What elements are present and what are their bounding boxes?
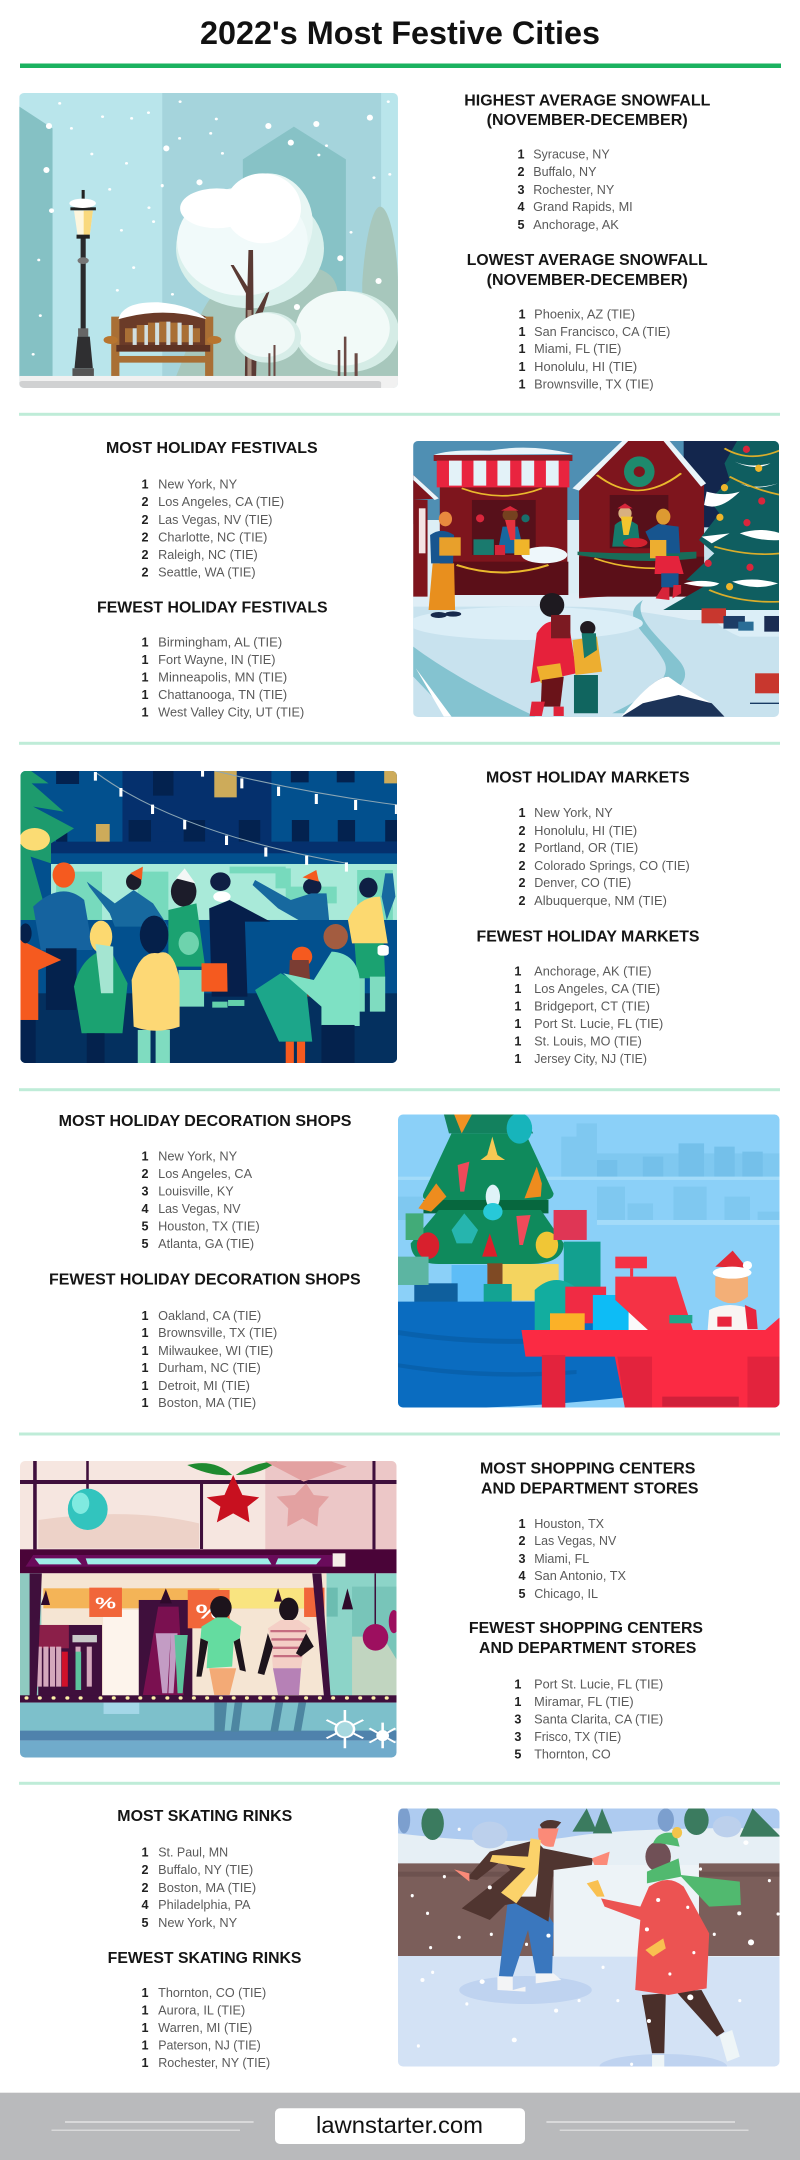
panel: holiday markets [19,769,700,1066]
store interior [41,1573,327,1697]
list: most skating rinks cities: Philadelphia, PA [158,1898,251,1912]
icon: ice shadow [459,1976,592,2004]
list: most decoration shops cities: 3 [141,1184,148,1198]
list: fewest decoration shops cities: Detroit, MI (TIE) [158,1379,250,1393]
list: most skating rinks cities [141,1846,256,1930]
list: most decoration shops cities: New York, NY [158,1150,238,1164]
icon: floor light strip [20,1695,397,1703]
list: highest snowfall cities: Grand Rapids, MI [533,200,633,214]
list: most festivals cities: Los Angeles, CA (TIE) [158,495,284,509]
list: fewest skating rinks cities: Aurora, IL (TIE) [158,2004,245,2018]
list: fewest markets cities: 1 [514,1034,521,1048]
list: fewest shopping centers cities [514,1678,663,1762]
list: fewest shopping centers cities: 5 [514,1748,521,1762]
list: most festivals cities [141,478,284,580]
heading: fewest holiday festivals: FEWEST HOLIDAY FESTIVALS [97,599,328,616]
list: fewest decoration shops cities: 1 [141,1379,148,1393]
list: most shopping centers cities: Chicago, IL [534,1587,598,1601]
icon: sale signs: % [95,1595,116,1612]
list: most decoration shops cities [141,1150,260,1251]
list: most shopping centers cities: 3 [518,1552,526,1566]
list: most markets cities: Portland, OR (TIE) [534,841,638,855]
list: fewest festivals cities: Birmingham, AL (TIE) [158,636,282,650]
icon: woman customer [645,509,684,600]
list: fewest markets cities [514,964,663,1066]
list: most markets cities: New York, NY [534,806,613,820]
list: lowest snowfall cities: 1 [518,308,526,322]
icon: teal ornament [68,1461,108,1530]
icon: child teal coat [255,947,312,1063]
list: fewest markets cities: 1 [514,982,521,996]
heading: fewest skating rinks: FEWEST SKATING RINKS [108,1950,302,1967]
list: most decoration shops cities: 5 [141,1220,148,1234]
heading: most skating rinks: MOST SKATING RINKS [117,1808,292,1825]
list: fewest markets cities: St. Louis, MO (TIE) [534,1034,642,1048]
list: most markets cities: Colorado Springs, CO (TIE) [534,859,690,873]
list: fewest festivals cities: 1 [141,653,148,667]
icon: striped shirt mannequin [258,1598,314,1695]
icon: child in yellow coat [572,621,602,713]
list: fewest shopping centers cities: 1 [514,1678,521,1692]
snowfall dots [411,1828,780,2066]
list: most decoration shops cities: Los Angeles, CA [158,1167,253,1181]
list: lowest snowfall cities: Brownsville, TX (TIE) [534,378,654,392]
heading: fewest decoration shops: FEWEST HOLIDAY DECORATION SHOPS [49,1272,361,1289]
list: fewest markets cities: 1 [514,1052,521,1066]
list: fewest decoration shops cities: 1 [141,1396,148,1410]
list: most festivals cities: Raleigh, NC (TIE) [158,548,258,562]
icon: woman dark coat [202,872,270,1008]
list: most markets cities [518,806,690,908]
list: most markets cities: 1 [518,806,526,820]
list: lowest snowfall cities [518,308,670,392]
list: fewest decoration shops cities: 1 [141,1344,148,1358]
list: highest snowfall cities: 3 [517,183,524,197]
list: fewest markets cities: Port St. Lucie, FL (TIE) [534,1017,663,1031]
list: highest snowfall cities: Buffalo, NY [533,165,597,179]
list: most markets cities: Albuquerque, NM (TIE) [534,894,667,908]
heading: lowest average snowfall: LOWEST AVERAGE SNOWFALL [467,252,708,269]
list: fewest decoration shops cities: 1 [141,1326,148,1340]
list: fewest festivals cities: 1 [141,688,148,702]
list: fewest festivals cities: Minneapolis, MN (TIE) [158,670,287,684]
list: most decoration shops cities: 4 [141,1202,148,1216]
list: most festivals cities: 2 [141,513,148,527]
list: highest snowfall cities: Anchorage, AK [533,218,619,232]
heading: most holiday festivals: MOST HOLIDAY FESTIVALS [106,440,318,457]
list: fewest skating rinks cities: 1 [141,2056,148,2070]
list: most skating rinks cities: 2 [141,1881,148,1895]
list: fewest skating rinks cities: 1 [141,1986,148,2000]
heading: most shopping centers: AND DEPARTMENT STORES [481,1480,698,1497]
list: fewest festivals cities: Chattanooga, TN (TIE) [158,688,287,702]
icon: green bow and red star [187,1462,277,1522]
list: most skating rinks cities: New York, NY [158,1916,238,1930]
icon: woman yellow coat [132,916,180,1031]
icon: person blue sweater orange hat [33,862,93,1010]
list: highest snowfall cities: 4 [517,200,524,214]
list: most decoration shops cities: Louisville, KY [158,1184,234,1198]
list: lowest snowfall cities: 1 [518,325,526,339]
heading: most holiday markets: MOST HOLIDAY MARKETS [486,769,690,786]
list: fewest festivals cities: 1 [141,636,148,650]
list: most shopping centers cities: Las Vegas, NV [534,1534,617,1548]
list: lowest snowfall cities: 1 [518,378,526,392]
list: most shopping centers cities: 1 [518,1517,526,1531]
list: fewest decoration shops cities: Boston, MA (TIE) [158,1396,256,1410]
panel: holiday decoration shops [49,1113,783,1410]
list: most markets cities: 2 [518,824,526,838]
list: most festivals cities: Las Vegas, NV (TIE) [158,513,272,527]
list: lowest snowfall cities: Phoenix, AZ (TIE) [534,308,635,322]
list: fewest markets cities: Bridgeport, CT (TIE) [534,1000,650,1014]
icon: red counter [521,1317,781,1408]
list: most skating rinks cities: 4 [141,1898,148,1912]
list: most skating rinks cities: St. Paul, MN [158,1846,228,1860]
list: fewest festivals cities: 1 [141,670,148,684]
heading: fewest shopping centers [469,1620,703,1657]
icon: lamp post [69,190,96,377]
footer decorative lines left [52,2121,254,2131]
list: fewest decoration shops cities: Oakland, CA (TIE) [158,1309,261,1323]
icon: sale signs: % [196,1601,223,1623]
list: fewest markets cities: 1 [514,1000,521,1014]
list: most markets cities: 2 [518,876,526,890]
list: fewest shopping centers cities: 1 [514,1695,521,1709]
list: most markets cities: 2 [518,894,526,908]
list: lowest snowfall cities: Honolulu, HI (TIE) [534,360,637,374]
icon: pillars [30,1573,331,1697]
heading: highest average snowfall: (NOVEMBER-DECEMBER) [487,112,688,129]
list: fewest festivals cities: Fort Wayne, IN (TIE) [158,653,276,667]
list: most festivals cities: 2 [141,566,148,580]
icon: person green coat white scarf [74,921,170,1063]
illustration: ice skating couple [398,1805,781,2079]
list: fewest markets cities: 1 [514,964,521,978]
icon: person with orange coat left [19,923,61,1063]
list: fewest shopping centers cities: Miramar, FL (TIE) [534,1695,634,1709]
illustration: snowy park with bench and lamp post [19,93,399,389]
list: most festivals cities: 2 [141,530,148,544]
list: most shopping centers cities: Miami, FL [534,1552,589,1566]
heading: highest average snowfall: HIGHEST AVERAGE SNOWFALL [464,92,711,109]
list: most decoration shops cities: Las Vegas, NV [158,1202,241,1216]
icon: background trees [398,1805,781,1848]
icon: left vendor and gifts [473,506,530,555]
list: fewest decoration shops cities: Brownsville, TX (TIE) [158,1326,277,1340]
list: highest snowfall cities: 1 [517,148,524,162]
list: fewest markets cities: 1 [514,1017,521,1031]
icon: snow mound [622,677,724,717]
list: most skating rinks cities: 2 [141,1863,148,1877]
footer logo box [275,2108,525,2144]
list: fewest skating rinks cities: 1 [141,2004,148,2018]
footer decorative lines right [546,2121,748,2131]
list: lowest snowfall cities: 1 [518,360,526,374]
icon: white curtain [103,1610,140,1697]
list: most festivals cities: New York, NY [158,478,238,492]
list: most shopping centers cities: 5 [518,1587,526,1601]
icon: reflective floor [20,1703,397,1758]
heading: lowest average snowfall: (NOVEMBER-DECEMBER) [487,272,688,289]
title: 2022's Most Festive Cities [200,15,600,51]
icon: left market stall [434,448,572,595]
list: most shopping centers cities: 2 [518,1534,526,1548]
list: most festivals cities: Seattle, WA (TIE) [158,566,256,580]
list: fewest decoration shops cities: 1 [141,1361,148,1375]
list: most skating rinks cities: 1 [141,1846,148,1860]
footer site name: lawnstarter.com [316,2112,483,2138]
list: fewest shopping centers cities: Frisco, TX (TIE) [534,1730,621,1744]
list: fewest shopping centers cities: Santa Clarita, CA (TIE) [534,1712,663,1726]
icon: stacked gifts [702,608,781,704]
list: highest snowfall cities [517,148,633,232]
list: fewest decoration shops cities [141,1309,277,1410]
icon: pink bow and star reflection [265,1462,347,1527]
icon: string lights [94,771,398,872]
icon: man teal sweater [283,924,360,1063]
list: most festivals cities: 2 [141,548,148,562]
list: highest snowfall cities: 5 [517,218,524,232]
panel: shopping centers [20,1460,703,1762]
icon: cash register [615,1257,693,1330]
icon: magenta ornaments [363,1573,399,1651]
icon: cashier [708,1251,758,1330]
heading: most shopping centers [480,1460,698,1497]
list: fewest skating rinks cities: 1 [141,2021,148,2035]
icon: blue tiered platform [398,1302,633,1408]
title underline [20,64,781,68]
list: fewest markets cities: Los Angeles, CA (TIE) [534,982,660,996]
list: most markets cities: 2 [518,859,526,873]
icon: left clothing rack [37,1625,102,1697]
snowfall dots [32,100,391,356]
list: most markets cities: Honolulu, HI (TIE) [534,824,637,838]
icon: center clothing rack [139,1600,192,1697]
icon: snow bushes [235,291,399,377]
icon: ceiling frame [20,1461,398,1549]
icon: sale signs [89,1588,338,1628]
icon: right vendor and bowl [612,503,647,547]
list: fewest shopping centers cities: Thornton, CO [534,1748,611,1762]
list: most shopping centers cities: San Antonio, TX [534,1569,627,1583]
heading: fewest shopping centers: FEWEST SHOPPING CENTERS [469,1620,703,1637]
icon: right market stall [572,441,706,598]
list: most decoration shops cities: 2 [141,1167,148,1181]
list: fewest skating rinks cities: Warren, MI (TIE) [158,2021,252,2035]
list: most decoration shops cities: 1 [141,1150,148,1164]
icon: woman in red coat [530,593,577,716]
list: fewest decoration shops cities: Durham, NC (TIE) [158,1361,261,1375]
list: fewest shopping centers cities: 3 [514,1730,521,1744]
list: fewest markets cities: Jersey City, NJ (TIE) [534,1052,647,1066]
list: fewest skating rinks cities: Thornton, CO (TIE) [158,1986,266,2000]
icon: shopping bags [535,1280,651,1336]
icon: female skater [587,1827,741,2067]
panel: snowfall [19,92,711,392]
heading: most shopping centers: MOST SHOPPING CENTERS [480,1460,695,1477]
icon: hanging cone lamps [41,1588,353,1609]
list: fewest decoration shops cities: Milwaukee, WI (TIE) [158,1344,273,1358]
icon: green shirt mannequin [196,1596,246,1695]
list: most shopping centers cities: 4 [518,1569,526,1583]
list: most festivals cities: Charlotte, NC (TIE) [158,530,267,544]
icon: man holding gifts [429,512,461,618]
icon: vendor waving [253,870,329,920]
list: highest snowfall cities: 2 [517,165,524,179]
wall [398,1863,781,1956]
list: fewest shopping centers cities: 3 [514,1712,521,1726]
list: highest snowfall cities: Rochester, NY [533,183,615,197]
heading: most decoration shops: MOST HOLIDAY DECORATION SHOPS [59,1113,351,1130]
list: most skating rinks cities: Boston, MA (TIE) [158,1881,256,1895]
footer band [0,2093,800,2160]
list: most shopping centers cities: Houston, TX [534,1517,605,1531]
list: most shopping centers cities [518,1517,627,1601]
list: fewest skating rinks cities: 1 [141,2038,148,2052]
list: most decoration shops cities: Atlanta, GA (TIE) [158,1237,254,1251]
list: fewest festivals cities: West Valley City, UT (TIE) [158,706,304,720]
illustration: decoration shop with tree and cashier [398,1113,783,1409]
heading: fewest holiday markets: FEWEST HOLIDAY MARKETS [476,929,700,946]
panel: holiday festivals [97,440,781,720]
list: most decoration shops cities: 5 [141,1237,148,1251]
icon: snowflakes [327,1710,395,1748]
list: most markets cities: Denver, CO (TIE) [534,876,631,890]
heading: fewest shopping centers: AND DEPARTMENT STORES [479,1640,696,1657]
list: most festivals cities: 1 [141,478,148,492]
list: lowest snowfall cities: San Francisco, CA (TIE) [534,325,670,339]
icon: small side stall [413,475,439,597]
list: fewest skating rinks cities [141,1986,270,2070]
list: fewest shopping centers cities: Port St. Lucie, FL (TIE) [534,1678,663,1692]
list: fewest skating rinks cities: Rochester, NY (TIE) [158,2056,270,2070]
list: fewest markets cities: Anchorage, AK (TIE) [534,964,652,978]
icon: person yellow sweater back [348,873,395,1012]
illustration: christmas market [408,441,781,717]
icon: person green dress [168,868,205,1007]
illustration: crowd at holiday market [19,771,398,1064]
list: highest snowfall cities: Syracuse, NY [533,148,610,162]
icon: christmas tree with ornaments [406,1113,564,1284]
icon: christmas tree [663,441,781,610]
list: most markets cities: 2 [518,841,526,855]
list: lowest snowfall cities: Miami, FL (TIE) [534,342,621,356]
icon: male skater [454,1820,610,1992]
icon: gift boxes behind tree [398,1210,601,1311]
list: lowest snowfall cities: 1 [518,342,526,356]
icon: park bench [104,302,221,377]
list: most skating rinks cities: Buffalo, NY (TIE) [158,1863,253,1877]
list: most decoration shops cities: Houston, TX (TIE) [158,1220,260,1234]
heading: highest average snowfall [464,92,711,129]
heading: lowest average snowfall [467,252,708,289]
list: fewest decoration shops cities: 1 [141,1309,148,1323]
list: most skating rinks cities: 5 [141,1916,148,1930]
list: most festivals cities: 2 [141,495,148,509]
illustration: shop window with mannequins [20,1461,399,1758]
panel: skating rinks [108,1805,781,2079]
list: fewest festivals cities: 1 [141,706,148,720]
icon: person at counter blue [87,867,168,927]
icon: store canopy [20,1549,397,1573]
list: fewest skating rinks cities: Paterson, NJ (TIE) [158,2038,261,2052]
icon: snow covered tree [176,173,324,376]
list: fewest festivals cities [141,636,304,720]
